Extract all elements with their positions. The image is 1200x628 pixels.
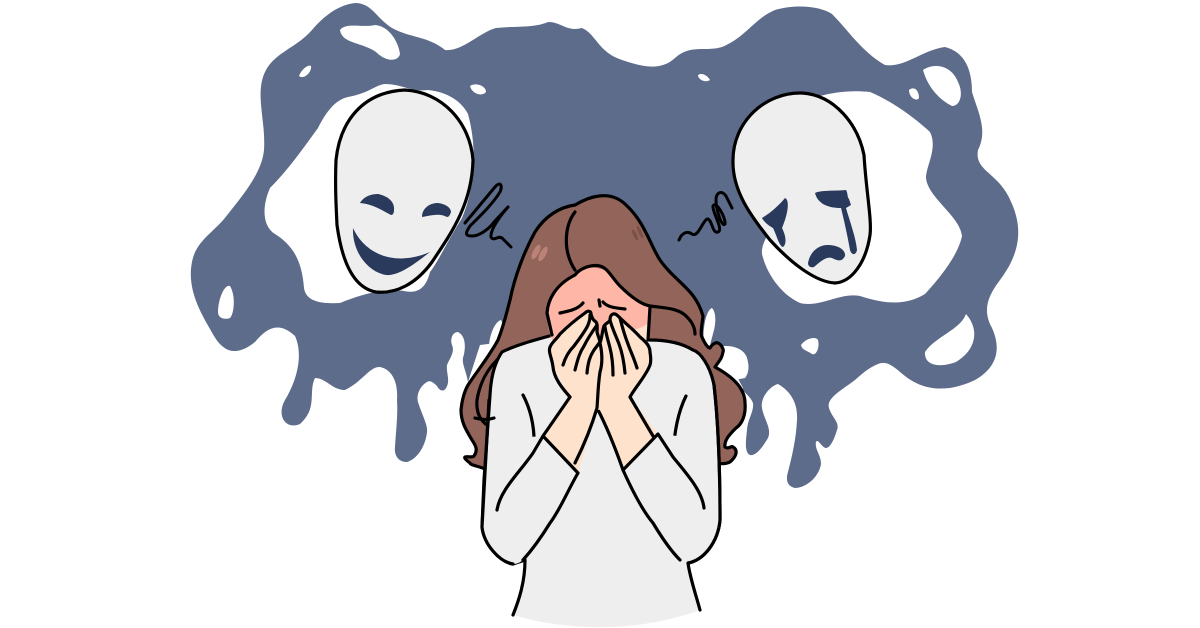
sad eye left with tear <box>762 198 788 247</box>
dark cloud blob <box>191 3 1018 488</box>
hair highlights <box>530 225 645 262</box>
white patch behind sad mask <box>762 91 962 304</box>
sad eye right with tear <box>815 190 857 254</box>
left hand <box>550 310 600 410</box>
arm folds <box>523 395 686 457</box>
repaint sweater edges <box>482 385 720 564</box>
right sleeve outlines <box>623 434 704 560</box>
cloud holes <box>218 25 974 380</box>
happy eyes <box>360 194 394 215</box>
sweater body <box>482 335 720 627</box>
happy mouth <box>353 228 430 275</box>
white patch behind happy mask <box>265 84 474 303</box>
eyes <box>560 300 625 313</box>
fingers <box>563 315 637 375</box>
inner hair curl <box>475 360 497 425</box>
hair <box>461 196 745 469</box>
hair part <box>566 212 575 270</box>
face shadow <box>630 322 649 340</box>
right hand <box>599 313 650 410</box>
left sleeve outlines <box>497 436 578 560</box>
left forearm and hand <box>543 397 597 473</box>
face outline and hair edge <box>547 265 695 340</box>
happy mask <box>336 90 473 292</box>
right sleeve <box>623 434 720 563</box>
right forearm <box>597 397 658 470</box>
scribble left <box>465 184 511 247</box>
hand outlines <box>549 311 651 408</box>
sad mouth <box>808 245 845 267</box>
forearm outlines <box>543 397 653 470</box>
face <box>548 268 650 350</box>
woman <box>461 196 745 627</box>
sad mask <box>733 93 870 283</box>
sweater outlines <box>482 335 720 615</box>
scribble right <box>679 193 732 240</box>
left sleeve <box>482 436 578 564</box>
